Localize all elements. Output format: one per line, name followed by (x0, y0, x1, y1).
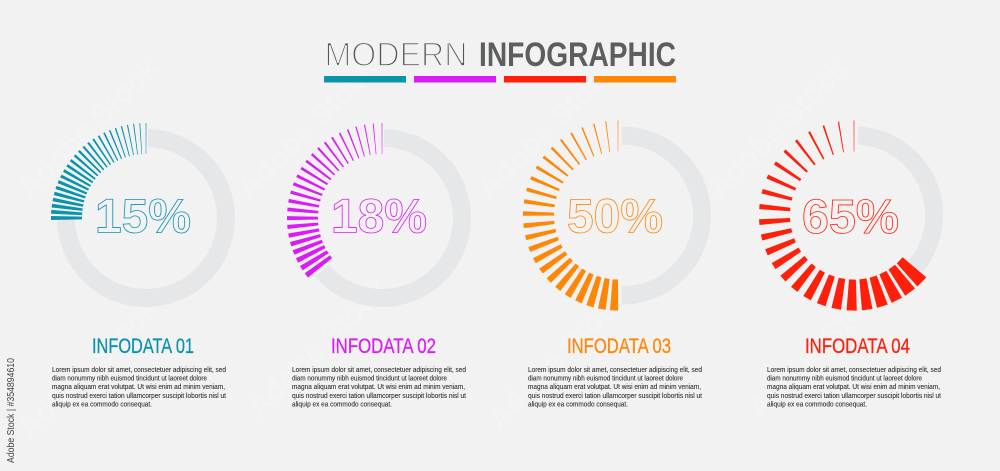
heading: infodata 03: INFODATA 03 (567, 334, 671, 358)
body text 03 (528, 367, 702, 408)
heading: infodata 02: INFODATA 02 (331, 334, 436, 358)
panel: infodata 03 (523, 120, 702, 408)
title: INFOGRAPHIC (479, 36, 676, 74)
percentage: 50%: 50% (567, 190, 663, 244)
text: Adobe Stock (242, 272, 395, 425)
body text 02: diam nonummy nibh euismod tincidunt ut laoreet dolore (292, 376, 447, 383)
text: Adobe Stock (12, 292, 165, 445)
body text 01 (52, 367, 226, 408)
body text 04: Lorem ipsum dolor sit amet, consectetuer adipiscing elit, sed (767, 367, 941, 374)
gauge: 18% (287, 123, 462, 298)
body text 03: magna aliquam erat volutpat. Ut wisi enim ad minim veniam, (528, 384, 701, 391)
percentage: 65%: 65% (802, 191, 899, 244)
body text 02 (292, 367, 466, 408)
body text 02: quis nostrud exerci tation ullamcorper suscipit lobortis nisl ut (292, 393, 466, 400)
body text 01: diam nonummy nibh euismod tincidunt ut laoreet dolore (52, 376, 207, 383)
percentage: 15%: 15% (95, 191, 191, 244)
body text 04: aliquip ex ea commodo consequat. (767, 401, 867, 408)
body text 01: quis nostrud exerci tation ullamcorper suscipit lobortis nisl ut (52, 393, 226, 400)
heading: infodata 04: INFODATA 04 (805, 334, 910, 358)
title: MODERN (324, 36, 468, 74)
body text 02: Lorem ipsum dolor sit amet, consectetuer adipiscing elit, sed (292, 367, 466, 374)
body text 03: Lorem ipsum dolor sit amet, consectetuer adipiscing elit, sed (528, 367, 702, 374)
text: Adobe Stock (472, 52, 625, 205)
body text 01: aliquip ex ea commodo consequat. (52, 401, 152, 408)
panel: infodata 02 (287, 123, 466, 408)
heading: infodata 01: INFODATA 01 (92, 334, 194, 358)
text: Adobe Stock (482, 282, 635, 435)
body text 01: Lorem ipsum dolor sit amet, consectetuer adipiscing elit, sed (52, 367, 226, 374)
panel: infodata 01 (51, 123, 226, 408)
panel: infodata 04 (759, 120, 941, 408)
stock id caption: Adobe Stock | #354894610 (6, 358, 17, 463)
percentage: 18%: 18% (331, 191, 427, 244)
body text 04: diam nonummy nibh euismod tincidunt ut laoreet dolore (767, 376, 922, 383)
body text 03: aliquip ex ea commodo consequat. (528, 401, 628, 408)
text: Adobe Stock (232, 52, 385, 205)
body text 02: magna aliquam erat volutpat. Ut wisi enim ad minim veniam, (292, 384, 465, 391)
body text 04 (767, 367, 941, 408)
body text 03: diam nonummy nibh euismod tincidunt ut laoreet dolore (528, 376, 683, 383)
body text 03: quis nostrud exerci tation ullamcorper suscipit lobortis nisl ut (528, 393, 702, 400)
body text 04: magna aliquam erat volutpat. Ut wisi enim ad minim veniam, (767, 384, 940, 391)
gauge: 50% (523, 120, 702, 311)
body text 02: aliquip ex ea commodo consequat. (292, 401, 392, 408)
colour legend bars (324, 76, 676, 82)
title (324, 36, 676, 74)
text: Adobe Stock (12, 52, 165, 205)
body text 04: quis nostrud exerci tation ullamcorper suscipit lobortis nisl ut (767, 393, 941, 400)
gauge: 15% (51, 123, 226, 298)
gauge: 65% (759, 120, 934, 311)
body text 01: magna aliquam erat volutpat. Ut wisi enim ad minim veniam, (52, 384, 225, 391)
text: Adobe Stock (702, 52, 855, 205)
text: Adobe Stock (742, 272, 895, 425)
